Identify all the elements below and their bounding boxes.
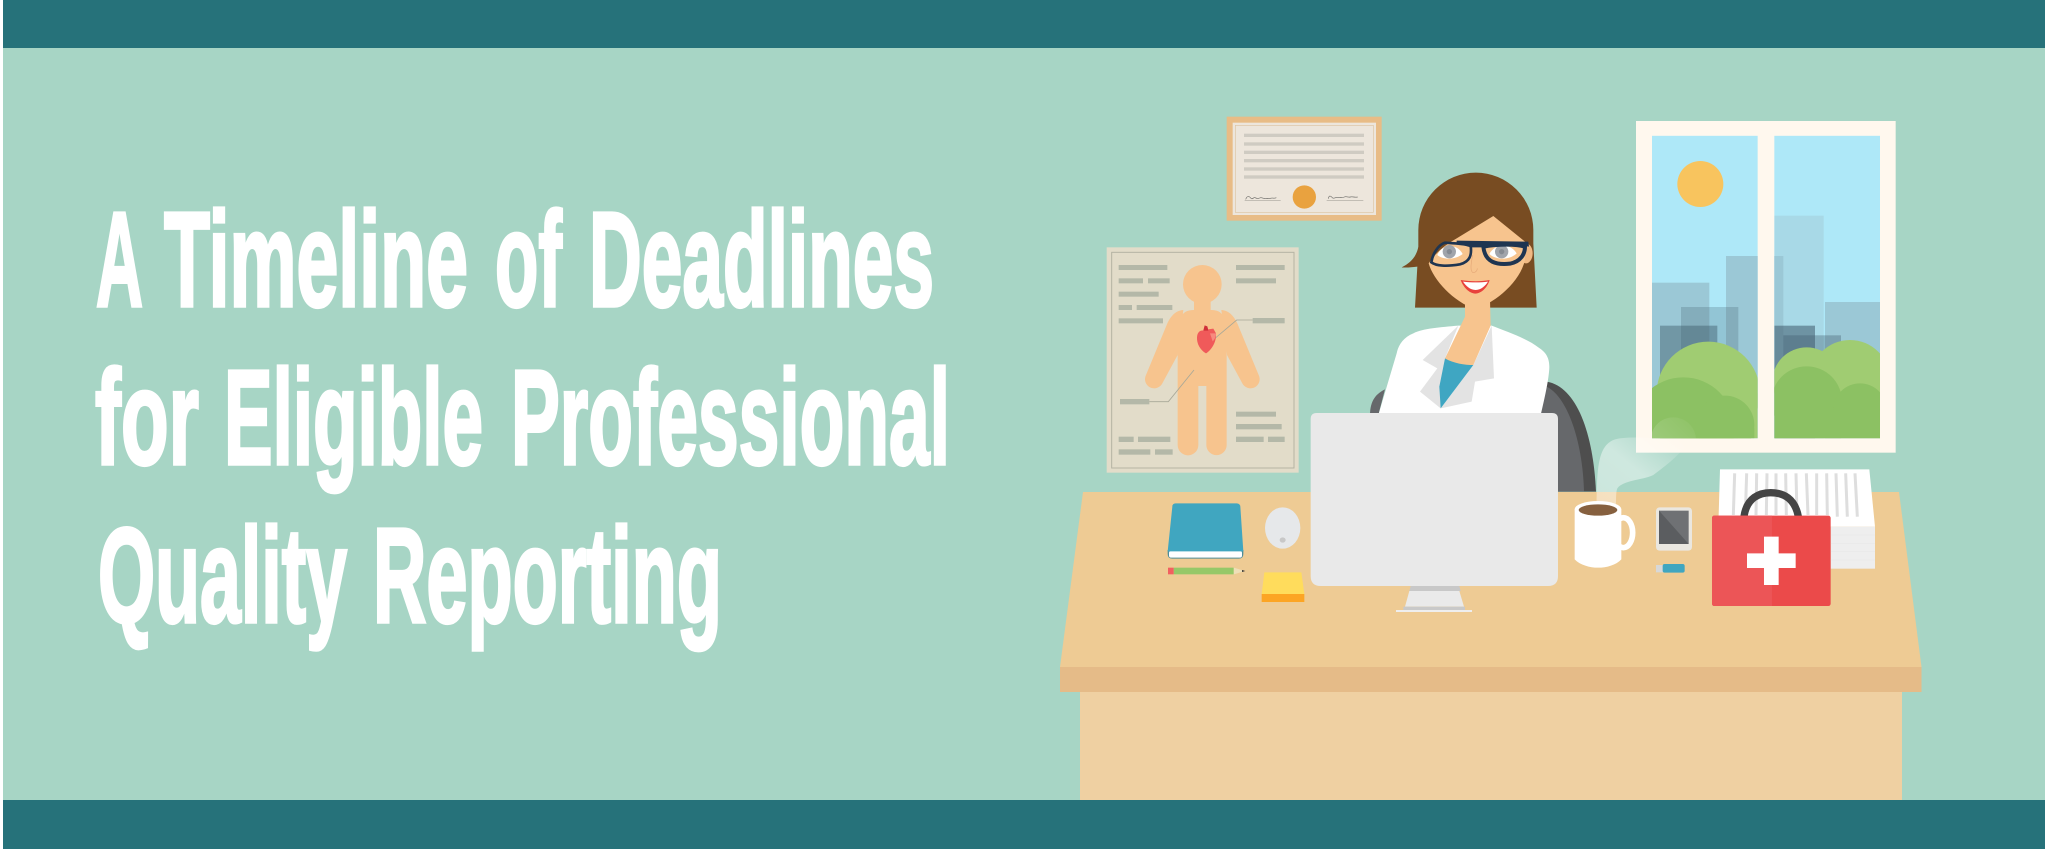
smartphone xyxy=(1656,507,1692,551)
title line 2: Eligible xyxy=(224,342,483,493)
title line 1: of xyxy=(495,184,563,335)
poster label bars xyxy=(1119,265,1285,455)
city buildings xyxy=(1652,216,1880,438)
anatomy poster xyxy=(1107,247,1299,473)
shirt xyxy=(1439,358,1473,408)
doctor xyxy=(1378,173,1549,415)
heart xyxy=(1197,325,1216,353)
title line 1: Deadlines xyxy=(589,184,934,335)
title line 1: Timeline xyxy=(164,184,468,335)
usb stick xyxy=(1656,564,1685,573)
paper stack xyxy=(1718,469,1875,569)
title line 3: Quality xyxy=(98,500,347,651)
neck xyxy=(1445,300,1491,365)
right lapel xyxy=(1441,326,1494,408)
monitor xyxy=(1311,413,1558,612)
sun xyxy=(1677,161,1723,207)
bottom band xyxy=(3,800,2045,849)
book xyxy=(1168,503,1243,559)
first aid kit xyxy=(1712,493,1831,606)
title line 2 xyxy=(95,342,950,493)
coffee steam xyxy=(1597,437,1690,513)
certificate xyxy=(1227,117,1382,221)
eyes xyxy=(1437,245,1517,259)
office chair xyxy=(1370,382,1596,492)
title line 2: Professional xyxy=(511,342,950,493)
face xyxy=(1429,216,1525,309)
title xyxy=(95,184,950,651)
lab coat xyxy=(1378,326,1549,415)
title line 3: Reporting xyxy=(373,500,722,651)
title line 1: A xyxy=(96,184,143,335)
nose xyxy=(1471,255,1477,273)
glasses xyxy=(1431,241,1529,266)
mug xyxy=(1575,501,1633,568)
desk items left xyxy=(1168,503,1304,602)
ear xyxy=(1519,243,1533,263)
title line 2: for xyxy=(95,342,199,493)
top band xyxy=(3,0,2045,48)
sticky notes xyxy=(1262,572,1304,602)
mouse xyxy=(1265,507,1300,549)
title line 1 xyxy=(96,184,934,335)
body figure xyxy=(1145,265,1260,455)
hair xyxy=(1402,173,1537,308)
bushes xyxy=(1652,340,1880,438)
left lapel xyxy=(1420,326,1458,408)
pencil xyxy=(1168,568,1245,574)
desk xyxy=(1060,492,1922,800)
window xyxy=(1632,121,1896,479)
mouth xyxy=(1461,280,1490,294)
desk items right xyxy=(1575,469,1875,606)
